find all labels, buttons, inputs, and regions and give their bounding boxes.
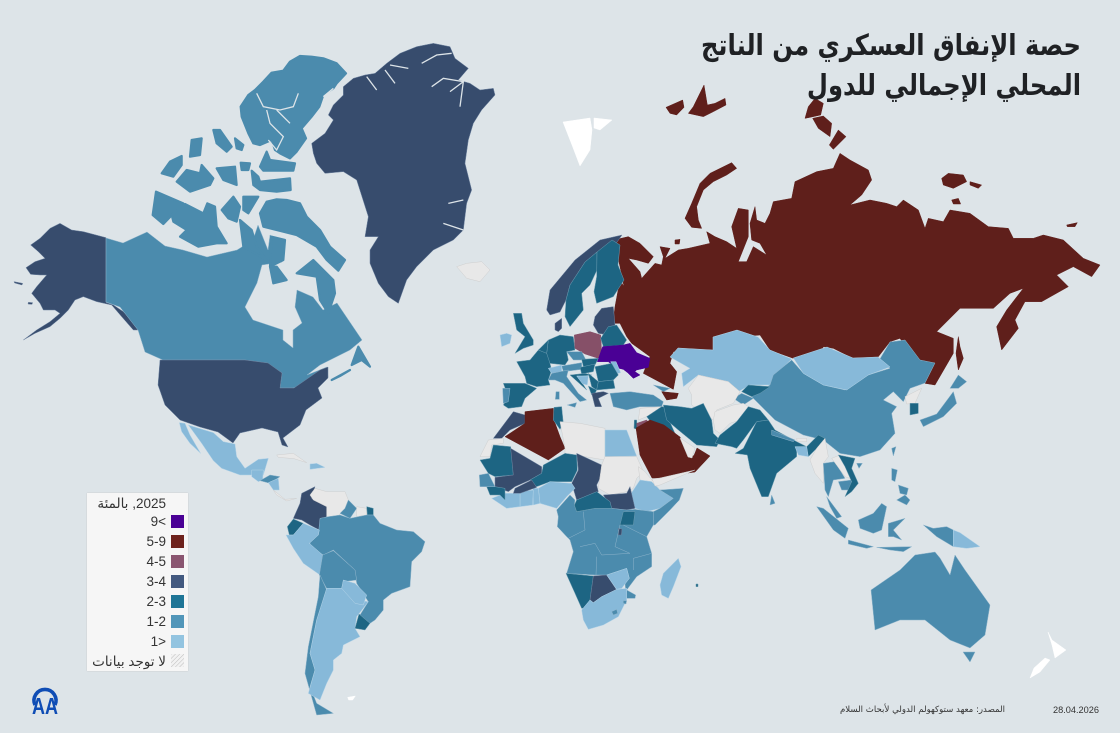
Ecuador — [287, 519, 303, 535]
Victoria Island — [172, 203, 227, 247]
Ukraine — [597, 343, 650, 375]
Svalbard west — [563, 118, 592, 166]
label: more than 9: 9< — [151, 514, 166, 529]
India — [735, 420, 825, 497]
Croatia — [570, 373, 592, 390]
Visayas — [898, 485, 908, 495]
legend — [87, 493, 188, 671]
Bulgaria — [597, 380, 615, 390]
swatch: no data — [171, 654, 184, 667]
Niger — [530, 453, 577, 487]
Nicaragua — [268, 478, 279, 490]
Somerset Island — [252, 171, 291, 192]
Melville Island — [162, 156, 182, 177]
Prince of Wales Island — [243, 197, 258, 213]
Canadian Arctic islands — [153, 56, 370, 380]
Saudi Arabia — [636, 420, 705, 478]
Ireland — [500, 333, 512, 347]
Australia — [871, 552, 990, 648]
Ellesmere Island — [241, 56, 346, 158]
North Korea — [905, 388, 922, 404]
Guinea — [487, 487, 505, 500]
Mexico and Central America — [179, 423, 325, 501]
Severnaya Zemlya — [805, 98, 823, 118]
Botswana — [590, 575, 617, 603]
Sakhalin — [956, 337, 963, 370]
region: Arabian Peninsula — [636, 420, 710, 486]
Peru — [286, 523, 323, 575]
title: المحلي الإجمالي للدول — [807, 68, 1081, 102]
New Guinea west — [923, 525, 953, 547]
Malaysia peninsula — [827, 497, 842, 518]
Poland — [574, 332, 602, 358]
Colombia — [293, 487, 327, 530]
Honduras — [260, 475, 280, 483]
Hungary — [580, 364, 595, 374]
region: Asia — [663, 330, 980, 552]
South Korea — [910, 403, 918, 415]
Iran — [663, 403, 720, 447]
Uruguay — [355, 614, 370, 630]
source text: المصدر: معهد ستوكهولم الدولي لأبحاث السلام — [840, 705, 1005, 715]
title — [701, 28, 1081, 102]
Tasmania — [963, 652, 975, 662]
Bathurst area — [177, 165, 213, 192]
Serbia — [588, 373, 598, 390]
Mali — [495, 448, 542, 492]
Mongolia — [793, 347, 890, 390]
Kazakhstan — [670, 330, 792, 392]
Lesotho — [612, 609, 618, 615]
swatch: less than 1 — [171, 635, 184, 648]
Czechia — [567, 352, 586, 360]
Chad — [572, 453, 602, 500]
Costa Rica and Panama — [273, 490, 297, 501]
Burkina Faso — [513, 480, 537, 493]
Chile — [305, 575, 333, 715]
Denmark — [555, 318, 562, 332]
Baffin Island — [260, 199, 345, 271]
date: 28.04.2026 — [1053, 705, 1099, 715]
United Kingdom — [513, 313, 533, 353]
Thailand — [823, 462, 845, 497]
Norway — [547, 235, 622, 315]
Venezuela — [310, 488, 348, 520]
Sudan — [598, 457, 643, 495]
Melville Peninsula — [270, 237, 285, 267]
Brazil — [310, 515, 425, 623]
label: 2-3: 2-3 — [146, 594, 166, 609]
Bolivia — [319, 551, 357, 588]
Sweden — [565, 252, 597, 327]
France — [517, 350, 552, 387]
Ivory Coast and Liberia — [492, 493, 520, 508]
Vietnam — [838, 455, 858, 497]
Austria — [562, 363, 582, 372]
Lesser Sunda Islands — [877, 547, 912, 552]
Namibia — [566, 573, 593, 608]
Bosnia — [577, 376, 588, 385]
Romania — [595, 363, 618, 382]
Ethiopia — [630, 480, 673, 512]
label: no data: لا توجد بيانات — [92, 654, 166, 669]
Suriname — [357, 507, 367, 517]
Switzerland — [548, 365, 562, 373]
Paraguay — [342, 580, 367, 605]
Western Sahara — [480, 438, 503, 457]
Syria — [638, 407, 662, 420]
Jordan — [637, 420, 650, 430]
label: 3-4: 3-4 — [146, 574, 166, 589]
Greenland — [312, 43, 495, 303]
Guyana — [340, 500, 357, 518]
Zimbabwe — [607, 568, 629, 589]
Cambodia — [838, 480, 852, 490]
Somalia — [653, 488, 683, 525]
Tajikistan — [733, 393, 753, 405]
Franz Josef Land east — [688, 85, 726, 117]
region: North America — [14, 43, 495, 501]
Alaska — [14, 223, 138, 340]
Crimea — [628, 372, 640, 378]
Canada mainland — [106, 225, 362, 388]
Iceland — [457, 262, 490, 282]
region: South America — [286, 487, 425, 715]
French Guiana — [367, 507, 373, 515]
Algeria — [505, 408, 565, 460]
Mauritius — [696, 584, 698, 587]
Myanmar — [810, 438, 828, 483]
Finland — [594, 240, 624, 303]
swatch: 2-3 — [171, 595, 184, 608]
Turkey — [610, 392, 663, 410]
Papua New Guinea — [953, 530, 980, 548]
Java — [848, 540, 873, 548]
South Africa — [582, 588, 627, 629]
Argentina — [308, 588, 368, 700]
Greece — [592, 392, 608, 407]
Newfoundland — [352, 347, 370, 367]
label: less than 1: 1> — [151, 634, 166, 649]
Baffin south — [297, 260, 335, 313]
Sri Lanka — [770, 495, 775, 505]
King William area — [222, 197, 240, 222]
Eritrea and Djibouti — [638, 467, 660, 490]
United Arab Emirates — [680, 438, 695, 458]
Albania and Macedonia — [588, 386, 597, 395]
Svalbard east — [594, 118, 612, 130]
Germany — [547, 335, 575, 365]
Italy — [548, 370, 587, 402]
Sardinia — [555, 392, 559, 399]
China — [752, 340, 935, 457]
title: حصة الإنفاق العسكري من الناتج — [701, 28, 1081, 62]
Portugal — [503, 388, 510, 403]
Devon Island — [260, 152, 295, 171]
Yemen — [652, 470, 695, 486]
Dominican Republic and Haiti — [310, 463, 325, 469]
Burundi and Rwanda — [618, 528, 622, 535]
New Zealand north — [1048, 632, 1066, 658]
Hokkaido — [950, 375, 967, 388]
Taiwan — [892, 447, 896, 456]
Central African Republic — [574, 492, 612, 512]
Russian Arctic archipelagos — [666, 85, 846, 149]
Sulawesi — [888, 518, 905, 540]
Madagascar — [660, 558, 681, 598]
swatch: 3-4 — [171, 575, 184, 588]
Bhutan — [797, 438, 807, 442]
Nepal — [772, 430, 795, 442]
Cuba — [277, 453, 307, 463]
Nova Scotia — [332, 370, 350, 380]
Iraq — [647, 407, 675, 435]
Mindanao — [897, 495, 910, 505]
label: 5-9: 5-9 — [146, 534, 166, 549]
New Zealand south — [1030, 658, 1050, 678]
Afghanistan — [713, 403, 748, 433]
Senegal — [479, 473, 495, 487]
Oman — [688, 448, 710, 473]
legend title: 2025, بالمئة — [97, 496, 166, 511]
Benelux — [538, 340, 548, 353]
Cornwallis group — [217, 167, 237, 185]
Tunisia — [553, 407, 563, 429]
Boothia — [240, 220, 267, 260]
Moldova — [611, 362, 621, 374]
swatch: 4-5 — [171, 555, 184, 568]
Honshu and Kyushu — [920, 392, 957, 427]
Luzon — [892, 468, 897, 482]
Uganda — [620, 512, 635, 525]
Ghana — [520, 490, 533, 507]
Banks Island — [153, 192, 183, 224]
Mauritania — [480, 445, 513, 477]
swatch: 5-9 — [171, 535, 184, 548]
Spain — [503, 383, 537, 408]
Hainan — [857, 463, 862, 468]
Georgia — [653, 385, 670, 392]
United States — [158, 360, 328, 447]
Eswatini — [623, 601, 627, 604]
New Siberian Islands — [942, 173, 967, 188]
region: Africa — [479, 430, 698, 629]
Russia — [613, 153, 1100, 389]
Baltic states — [593, 307, 615, 335]
label: 1-2: 1-2 — [146, 614, 166, 629]
Ellef Ringnes Island — [235, 138, 243, 150]
Belarus — [601, 325, 627, 347]
Russian mainland — [613, 153, 1100, 389]
swatch: more than 9 — [171, 515, 184, 528]
Borneo — [858, 503, 887, 533]
Baja California — [179, 423, 201, 453]
Guatemala and El Salvador — [252, 470, 263, 482]
Prince Patrick Island — [190, 138, 202, 157]
Libya — [560, 422, 605, 460]
Slovakia — [582, 358, 598, 367]
region: Oceania and Arctic territories — [563, 118, 1066, 678]
South Sudan — [603, 487, 635, 510]
swatch: 1-2 — [171, 615, 184, 628]
Benin and Togo — [533, 488, 540, 505]
Morocco — [493, 412, 525, 438]
Uzbekistan and Turkmenistan — [688, 375, 740, 420]
Axel Heiberg west — [213, 130, 232, 152]
Laos — [832, 455, 855, 480]
Pakistan — [715, 407, 768, 448]
Mexico — [188, 425, 268, 475]
Falkland Islands — [348, 696, 355, 700]
Armenia and Azerbaijan — [662, 392, 678, 400]
Novaya Zemlya — [685, 163, 737, 228]
Lougheed area — [241, 163, 250, 170]
Franz Josef Land west — [666, 100, 684, 115]
Egypt — [605, 430, 637, 457]
region: Europe and Middle East — [493, 235, 678, 460]
Sumatra — [817, 507, 848, 538]
Wrangel Island — [1067, 223, 1077, 227]
Bangladesh — [795, 447, 808, 457]
Southampton Island — [270, 267, 287, 283]
Sicily — [567, 403, 577, 407]
Kyrgyzstan — [742, 385, 770, 397]
label: 4-5: 4-5 — [146, 554, 166, 569]
Nigeria — [538, 482, 575, 508]
Central and East Africa — [557, 495, 653, 598]
Israel — [634, 420, 637, 429]
